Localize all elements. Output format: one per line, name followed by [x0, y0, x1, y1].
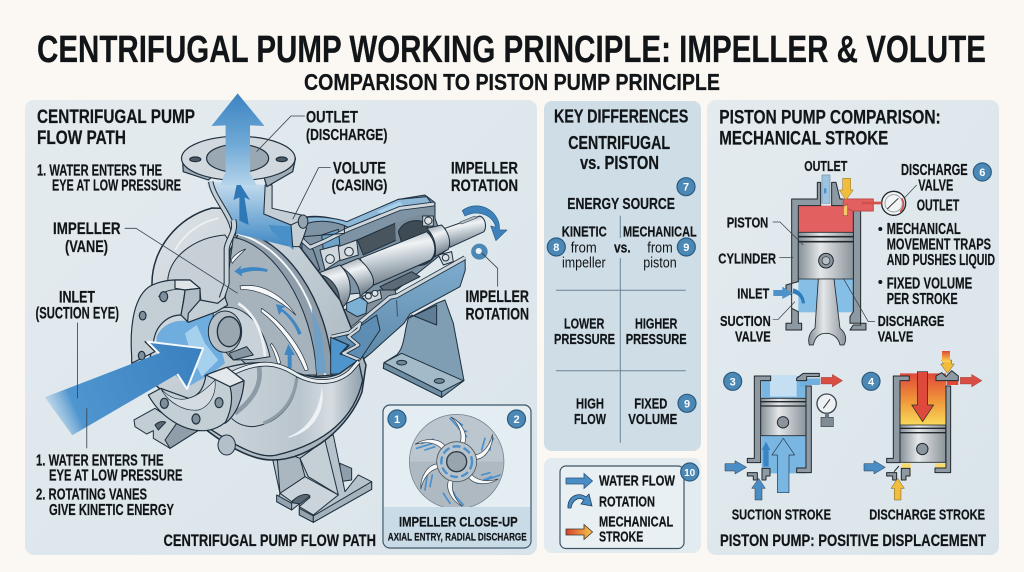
caption: impeller close-up	[388, 514, 527, 544]
labels: piston diagram: VALVE	[878, 329, 913, 346]
walls	[747, 373, 819, 480]
pocket and zigzag wall	[331, 315, 380, 374]
illustration: cutaway centrifugal pump	[45, 93, 507, 522]
badge 3	[724, 372, 742, 390]
pressure gauge	[882, 191, 906, 215]
row: flow: HIGH	[576, 395, 604, 412]
badge 8	[547, 238, 565, 256]
badge 3: 3	[730, 376, 736, 388]
badge 1	[388, 410, 406, 428]
lower trough	[337, 258, 465, 363]
caption: centrifugal pump flow path: CENTRIFUGAL PUMP FLOW PATH	[164, 531, 376, 550]
leader lines	[773, 185, 917, 322]
chamber fluids	[798, 206, 853, 232]
discharge valve yellow arrow	[839, 178, 853, 200]
labels: piston diagram: SUCTION	[720, 313, 771, 330]
row: pressure	[554, 315, 687, 348]
row: energy source values: MECHANICAL	[623, 224, 697, 241]
top arrow stem of discharge stroke	[942, 351, 950, 362]
caption: impeller close-up: IMPELLER CLOSE-UP	[399, 514, 518, 530]
label: inlet: (SUCTION EYE)	[36, 305, 119, 323]
connecting rod	[809, 279, 846, 345]
subtitle: COMPARISON TO PISTON PUMP PRINCIPLE	[304, 69, 720, 95]
heading: piston pump comparison: PISTON PUMP COMPARISON:	[719, 107, 941, 128]
leader lines	[77, 116, 498, 448]
legend: mechanical stroke: STROKE	[599, 529, 643, 546]
heading: centrifugal pump flow path: FLOW PATH	[37, 127, 126, 149]
heading: energy source: ENERGY SOURCE	[567, 196, 675, 213]
label: impeller vane: (VANE)	[65, 237, 108, 256]
panel: legend	[544, 458, 701, 553]
rotation arrow and dot	[462, 206, 507, 260]
badge 6: 6	[979, 167, 985, 179]
row: flow: FLOW	[574, 411, 607, 428]
arrows	[725, 461, 747, 474]
row: pressure: LOWER	[564, 315, 604, 332]
outlet pipe	[822, 175, 830, 203]
labels: piston diagram: OUTLET	[804, 159, 847, 175]
legend: rotation: ROTATION	[599, 494, 655, 511]
badge 1: 1	[394, 414, 400, 426]
heading: piston pump comparison	[719, 107, 941, 149]
caption: impeller close-up: AXIAL ENTRY, RADIAL DISCHARGE	[388, 532, 527, 544]
badge 8: 8	[553, 242, 559, 254]
bullet list: PER STROKE	[887, 291, 958, 308]
outlet flange	[181, 136, 295, 187]
labels: piston diagram	[718, 159, 968, 346]
inlet flange lower	[148, 367, 244, 431]
bullet list	[878, 221, 995, 308]
text: step 1 upper: 1. WATER ENTERS THE	[37, 163, 162, 180]
row: energy source values: piston	[643, 255, 677, 272]
label: impeller rotation lower: IMPELLER	[466, 287, 529, 306]
heading: centrifugal vs piston	[568, 133, 670, 173]
row: energy source values: from	[647, 239, 673, 256]
label: impeller rotation top	[451, 158, 518, 195]
flow marks	[417, 418, 500, 505]
badge 2: 2	[513, 414, 520, 426]
label: outlet discharge: OUTLET	[306, 108, 358, 127]
piston body	[798, 232, 853, 279]
legend: mechanical stroke: MECHANICAL	[599, 514, 673, 531]
casing inner ring, impeller and hub	[157, 218, 333, 387]
impeller vanes	[415, 415, 498, 509]
label: outlet discharge	[306, 108, 387, 144]
heading: key differences: KEY DIFFERENCES	[554, 106, 688, 126]
text: steps 1 and 2 lower: GIVE KINETIC ENERGY	[49, 502, 174, 519]
text: steps 1 and 2 lower: EYE AT LOW PRESSURE	[49, 468, 183, 485]
panel: key differences	[544, 101, 701, 451]
legend: rotation	[568, 494, 655, 511]
right support foot	[383, 300, 464, 397]
impeller flow arrows	[234, 265, 302, 368]
row: flow: FIXED	[634, 395, 667, 412]
heading: centrifugal vs piston: CENTRIFUGAL	[568, 133, 670, 153]
inlet arrow and valve	[773, 287, 793, 299]
impeller rim	[225, 231, 333, 377]
legend: mechanical stroke	[566, 514, 673, 546]
inset: impeller close-up	[383, 405, 531, 548]
badge 10	[681, 463, 699, 481]
badge 6	[973, 163, 991, 181]
arrows	[912, 372, 934, 422]
badge 7: 7	[683, 182, 689, 194]
discharge neck	[207, 180, 344, 250]
badge 9 lower: 9	[684, 398, 690, 410]
badge 9	[677, 238, 695, 256]
legend: water flow: WATER FLOW	[599, 473, 676, 490]
hub	[213, 307, 270, 360]
labels: piston diagram: PISTON	[727, 215, 768, 232]
boss	[218, 435, 235, 455]
volute casing body	[150, 208, 366, 460]
heading: centrifugal pump flow path	[37, 106, 195, 149]
label: outlet discharge: (DISCHARGE)	[306, 127, 387, 144]
row: energy source values: impeller	[562, 255, 606, 272]
piston	[900, 425, 946, 462]
heading: centrifugal vs piston: vs. PISTON	[580, 153, 659, 173]
label: inlet: INLET	[59, 289, 95, 307]
badge 7	[677, 178, 695, 196]
text: step 1 upper: EYE AT LOW PRESSURE	[52, 178, 181, 195]
row: energy source values: KINETIC	[562, 224, 607, 241]
badge 2	[508, 410, 526, 428]
labels: piston diagram: VALVE	[735, 329, 771, 346]
cylinder walls	[786, 182, 873, 330]
badge 4: 4	[868, 376, 875, 388]
row: pressure: PRESSURE	[626, 331, 687, 348]
bottom support foot	[271, 435, 372, 522]
row: flow	[574, 395, 677, 428]
row: energy source values: from	[571, 239, 597, 256]
row: energy source values	[562, 224, 697, 272]
blue outlet arrow	[211, 93, 264, 185]
heading: piston pump comparison: MECHANICAL STROKE	[719, 128, 888, 149]
eye water	[157, 313, 225, 387]
shaft and bearings	[307, 216, 485, 363]
row: pressure: PRESSURE	[554, 331, 615, 348]
row: pressure: HIGHER	[635, 315, 677, 332]
legend: water flow	[566, 473, 676, 490]
volute divider wall and inlet flange upper	[131, 220, 234, 363]
label: impeller vane: IMPELLER	[53, 219, 120, 238]
top wall band	[302, 204, 434, 247]
labels: piston diagram: DISCHARGE	[901, 162, 968, 179]
gauge	[817, 394, 836, 413]
piston	[761, 398, 806, 436]
labels: piston diagram: DISCHARGE	[878, 313, 944, 330]
diagram: discharge stroke	[864, 360, 982, 500]
labels: piston diagram: CYLINDER	[718, 250, 776, 267]
label: impeller vane	[53, 219, 120, 256]
text: step 1 upper	[37, 163, 181, 195]
text: steps 1 and 2 lower	[36, 453, 183, 519]
row: energy source values: vs.	[614, 239, 631, 256]
label: volute casing: VOLUTE	[333, 158, 386, 177]
badge 9: 9	[683, 242, 689, 254]
comparison table dividers	[556, 216, 686, 443]
label: volute casing	[332, 158, 387, 195]
labels: piston diagram: INLET	[737, 285, 769, 302]
caption: discharge stroke: DISCHARGE STROKE	[869, 506, 985, 523]
label: impeller rotation lower: ROTATION	[466, 304, 529, 323]
diagram: suction stroke	[725, 373, 843, 500]
bearing housing	[300, 195, 447, 297]
labels: piston diagram: OUTLET	[917, 198, 960, 215]
heading: centrifugal pump flow path: CENTRIFUGAL PUMP	[37, 106, 195, 128]
bullet list: FIXED VOLUME	[887, 275, 972, 292]
badge 10: 10	[684, 468, 696, 479]
labels: piston diagram: VALVE	[918, 177, 953, 194]
bullet list: MECHANICAL	[887, 221, 961, 238]
label: volute casing: (CASING)	[332, 178, 387, 195]
caption: suction stroke: SUCTION STROKE	[732, 506, 831, 523]
diagram: piston cylinder	[773, 175, 917, 345]
label: impeller rotation top: IMPELLER	[451, 158, 518, 177]
panel: piston pump comparison	[707, 100, 999, 555]
big blue inlet arrow	[45, 342, 203, 435]
walls	[887, 371, 958, 480]
label: impeller rotation lower	[466, 287, 529, 323]
badge 4	[862, 372, 880, 390]
badge 9 lower	[678, 394, 696, 412]
left support foot	[134, 408, 202, 448]
label: impeller rotation top: ROTATION	[451, 176, 518, 195]
row: flow: VOLUME	[628, 411, 677, 428]
text: steps 1 and 2 lower: 2. ROTATING VANES	[36, 486, 147, 503]
vanes	[231, 249, 308, 371]
text: steps 1 and 2 lower: 1. WATER ENTERS THE	[36, 453, 164, 470]
panel: centrifugal pump flow path	[25, 93, 537, 555]
front lower shell	[205, 360, 363, 456]
label: inlet	[36, 289, 119, 323]
